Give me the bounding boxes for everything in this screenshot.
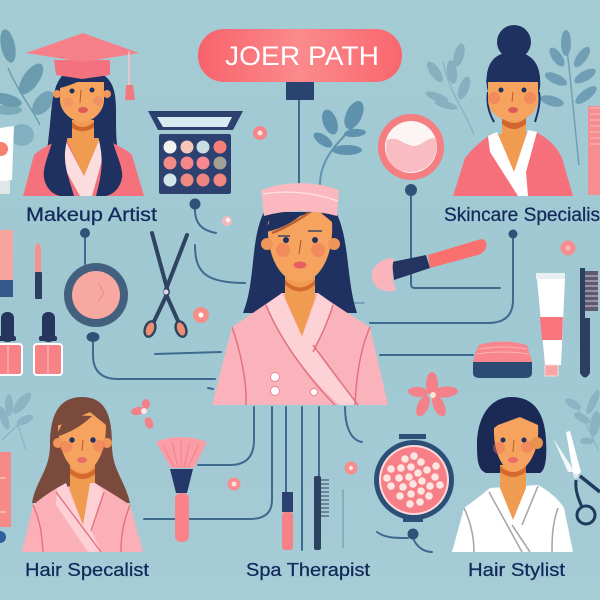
icon: makeup brush <box>372 239 486 291</box>
character: central spa professional <box>212 183 388 405</box>
icon: open scissors <box>143 233 188 338</box>
connector lines <box>85 100 513 552</box>
plant: top right <box>539 30 599 165</box>
label: makeup artist: Makeup Artist <box>26 205 158 226</box>
icon: powder compact <box>64 263 128 327</box>
plant: top left <box>0 28 58 146</box>
icon: lipstick bottom left <box>0 452 11 527</box>
character: makeup artist <box>23 33 144 196</box>
banner post <box>286 82 314 100</box>
icon: pink comb top right <box>588 106 600 195</box>
flower: small markers <box>193 126 576 490</box>
label: hair specialist: Hair Specalist <box>25 560 149 580</box>
flower: large coral <box>408 372 458 418</box>
icon: lip brush <box>282 492 293 550</box>
icon: cream tube left <box>0 126 14 194</box>
icon: round mirror <box>378 114 444 180</box>
plant: bottom left <box>0 390 35 450</box>
icon: nail polish left <box>0 312 22 375</box>
plant: top middle right <box>424 42 474 135</box>
icon: blue dot bottom left <box>0 531 6 543</box>
icon: cream jar <box>473 342 532 378</box>
character: hair stylist <box>452 397 573 552</box>
plant: bottom right <box>563 389 600 450</box>
icon: fan brush <box>156 437 207 542</box>
icon: blush compact <box>374 434 454 522</box>
label: spa therapist: Spa Therapist <box>246 560 370 580</box>
icon: lipstick tube left <box>0 230 13 297</box>
icon: slim comb <box>314 476 329 550</box>
label: hair stylist: Hair Stylist <box>468 560 565 580</box>
icon: lip pencil <box>35 243 42 299</box>
character: hair specialist <box>22 397 143 552</box>
icon: nail polish right <box>34 312 62 375</box>
icon: salon scissors <box>553 431 600 524</box>
icon: brush comb <box>580 268 598 378</box>
title banner: JOER PATH <box>225 41 379 71</box>
icon: cream tube right <box>536 273 565 376</box>
plant: top centre <box>311 98 368 185</box>
character: skincare specialist <box>453 25 573 196</box>
label: skincare specialist: Skincare Specialis <box>444 205 600 226</box>
connector dots <box>80 184 518 540</box>
icon: makeup palette <box>148 111 243 194</box>
flower: left <box>130 399 155 430</box>
title banner <box>198 29 402 82</box>
